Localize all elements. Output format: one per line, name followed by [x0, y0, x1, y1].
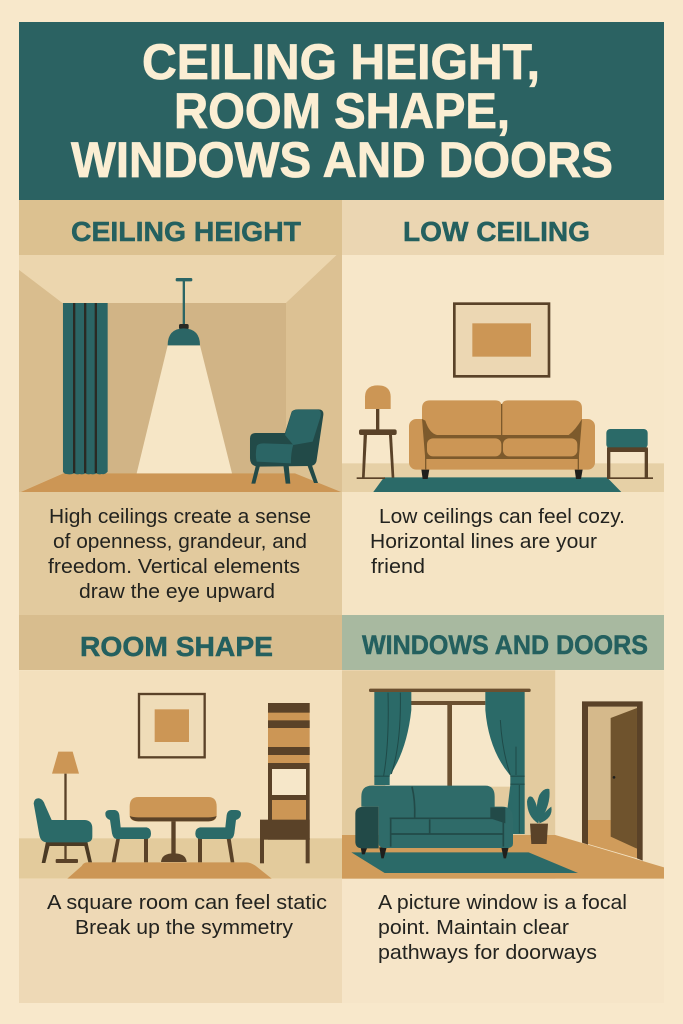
heading: windows and doors: [342, 615, 664, 670]
heading: low ceiling: [342, 200, 664, 255]
heading: ceiling height: CEILING HEIGHT: [71, 216, 301, 247]
heading: low ceiling: LOW CEILING: [403, 216, 590, 247]
title banner: CEILING HEIGHT,: [142, 34, 540, 90]
curtain: [63, 303, 108, 474]
left curtain: [374, 692, 411, 785]
floor lamp: [52, 752, 79, 863]
title banner: [19, 22, 664, 200]
panel: low ceiling: [342, 200, 664, 615]
illustration: low ceiling room: [342, 255, 664, 493]
right dining chair: [195, 810, 241, 862]
caption: room shape: Break up the symmetry: [75, 917, 293, 939]
caption: ceiling height: [19, 492, 342, 615]
caption: windows and doors: pathways for doorways: [378, 942, 597, 964]
curtain rod: [369, 689, 531, 692]
heading: room shape: [19, 615, 342, 670]
heading: ceiling height: [19, 200, 342, 255]
stool: [606, 429, 653, 479]
table: [130, 797, 217, 862]
caption: room shape: [19, 879, 342, 1003]
left dining chair: [105, 810, 151, 862]
framed picture: [454, 304, 549, 376]
side table and lamp: [357, 385, 397, 479]
caption: low ceiling: Horizontal lines are your: [370, 531, 597, 553]
bookshelf: [260, 703, 310, 863]
caption: ceiling height: draw the eye upward: [79, 581, 275, 603]
caption: windows and doors: A picture window is a focal: [378, 892, 627, 914]
caption: ceiling height: freedom. Vertical elements: [48, 556, 300, 578]
sofa: [355, 786, 513, 858]
caption: room shape: A square room can feel static: [47, 892, 327, 914]
potted plant: [527, 789, 552, 844]
panel: ceiling height: [19, 200, 342, 615]
sofa: [409, 400, 595, 479]
doorway: [582, 701, 643, 861]
right curtain: [485, 692, 525, 834]
window: [385, 693, 510, 787]
panel: windows and doors: [342, 615, 664, 1003]
caption: windows and doors: [342, 879, 664, 1003]
caption: low ceiling: [342, 492, 664, 615]
pendant lamp: [168, 278, 200, 345]
illustration: dining room: [19, 670, 342, 879]
caption: ceiling height: of openness, grandeur, and: [53, 531, 307, 553]
caption: low ceiling: friend: [371, 556, 425, 578]
panel: room shape: [19, 615, 342, 1003]
rug: [373, 477, 622, 492]
caption: ceiling height: High ceilings create a sense: [49, 506, 311, 528]
illustration: living room with window and door: [342, 670, 664, 879]
armchair: [250, 409, 323, 484]
rug: [351, 852, 578, 873]
light beam: [137, 345, 232, 473]
illustration: high ceiling room: [19, 255, 342, 493]
title banner: WINDOWS AND DOORS: [71, 132, 613, 188]
heading: windows and doors: WINDOWS AND DOORS: [362, 630, 648, 660]
rug: [67, 862, 272, 879]
caption: windows and doors: point. Maintain clear: [378, 917, 569, 939]
heading: room shape: ROOM SHAPE: [80, 631, 273, 662]
caption: low ceiling: Low ceilings can feel cozy.: [379, 506, 625, 528]
title banner: ROOM SHAPE,: [174, 83, 510, 139]
armchair: [34, 798, 92, 863]
framed picture: [139, 694, 205, 757]
